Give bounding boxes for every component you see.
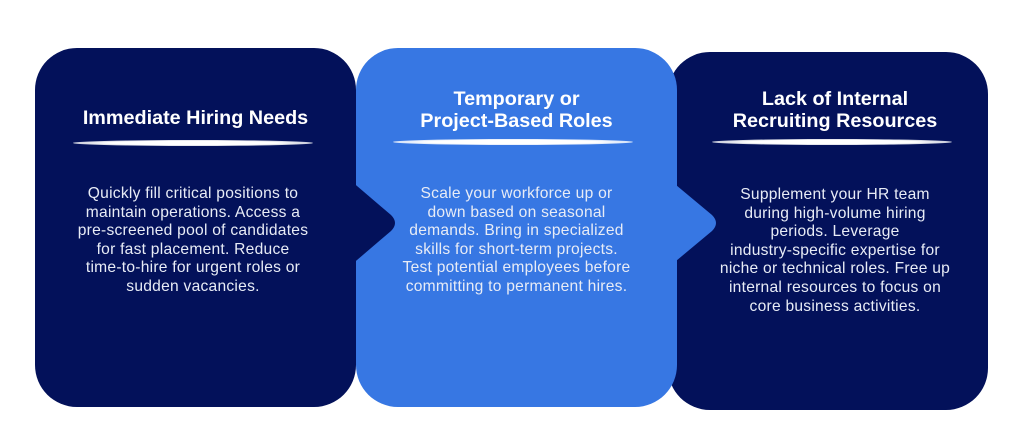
panel: lack of internal recruiting resources [712,88,952,315]
text block: industry-specific expertise for [730,242,940,259]
heading: Lack of Internal [762,88,908,110]
text block: Test potential employees before [403,259,630,276]
underline [73,140,313,146]
text block [78,185,308,295]
text block: time-to-hire for urgent roles or [86,259,300,276]
underline [712,139,952,145]
underline [393,139,633,145]
panel: immediate hiring needs [73,107,313,295]
panel: temporary or project-based roles [393,88,633,295]
text block: Supplement your HR team [740,186,930,203]
text block: maintain operations. Access a [86,204,300,221]
text block [402,185,630,295]
heading [733,88,937,132]
text block: Scale your workforce up or [420,185,612,202]
text block: demands. Bring in specialized [409,222,624,239]
text block: periods. Leverage [770,223,900,240]
heading: Project-Based Roles [420,110,613,132]
text block: core business activities. [750,298,920,315]
text block: internal resources to focus on [729,279,941,296]
text block: niche or technical roles. Free up [720,260,950,277]
text block: during high-volume hiring [744,205,926,222]
text block [720,186,950,315]
heading: Recruiting Resources [733,110,937,132]
card 1 background with arrow [35,48,395,407]
text block: Quickly fill critical positions to [88,185,298,202]
heading: Immediate Hiring Needs [83,107,308,129]
heading [420,88,613,132]
text block: down based on seasonal [427,204,606,221]
text block: skills for short-term projects. [415,241,618,258]
heading: Temporary or [453,88,580,110]
card 2 background with arrow [356,48,716,407]
card 3 background [668,52,988,410]
text block: pre-screened pool of candidates [78,222,308,239]
text block: sudden vacancies. [126,278,260,295]
text block: committing to permanent hires. [406,278,627,295]
text block: for fast placement. Reduce [97,241,289,258]
